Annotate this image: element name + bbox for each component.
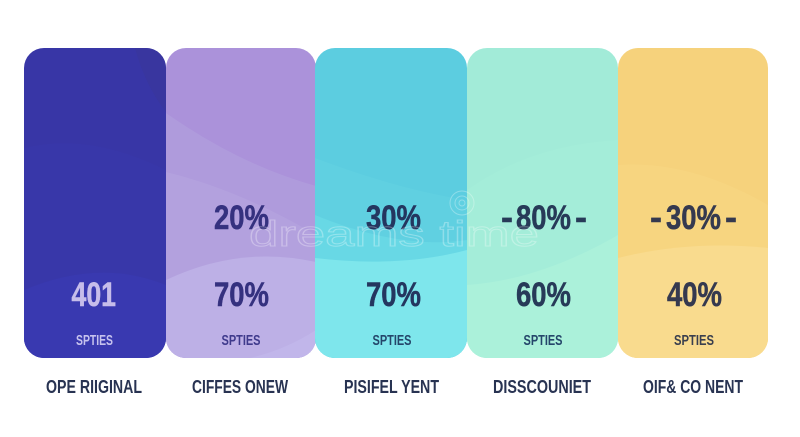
- value: 40%: 40%: [667, 276, 722, 314]
- value: -80%: 80%: [516, 199, 571, 237]
- panel: ciffes onew: [166, 48, 316, 358]
- watermark: dreams time: [249, 213, 539, 254]
- value: -80%: -: [501, 199, 513, 237]
- panel: pisifel yent: [315, 48, 467, 358]
- value: 70%: 70%: [214, 276, 269, 314]
- panel: ope riiginal: [24, 48, 166, 358]
- value: 401: 401: [72, 276, 116, 314]
- value: -30%: 30%: [666, 199, 721, 237]
- panel: disscouniet: [467, 48, 618, 358]
- label: pisifel yent: PISIFEL YENT: [344, 377, 439, 397]
- label: ope riiginal: OPE RIIGINAL: [46, 377, 142, 397]
- value: 70%: 70%: [366, 276, 421, 314]
- caption: spties: SPTIES: [674, 332, 714, 349]
- value: 60%: 60%: [516, 276, 571, 314]
- caption: spties: SPTIES: [76, 332, 113, 349]
- value: -80%: -: [575, 199, 587, 237]
- label: disscouniet: DISSCOUNIET: [493, 377, 591, 397]
- value: 30%: 30%: [366, 199, 421, 237]
- panel: oif& co nent: [618, 48, 768, 358]
- caption: spties: SPTIES: [222, 332, 260, 349]
- caption: spties: SPTIES: [524, 332, 562, 349]
- value: -30%: -: [725, 199, 737, 237]
- value: 20%: 20%: [214, 199, 269, 237]
- label: oif& co nent: OIF& CO NENT: [643, 377, 743, 397]
- label: ciffes onew: CIFFES ONEW: [192, 377, 288, 397]
- watermark: [249, 191, 539, 254]
- value: -30%: -: [650, 199, 662, 237]
- caption: spties: SPTIES: [372, 332, 412, 349]
